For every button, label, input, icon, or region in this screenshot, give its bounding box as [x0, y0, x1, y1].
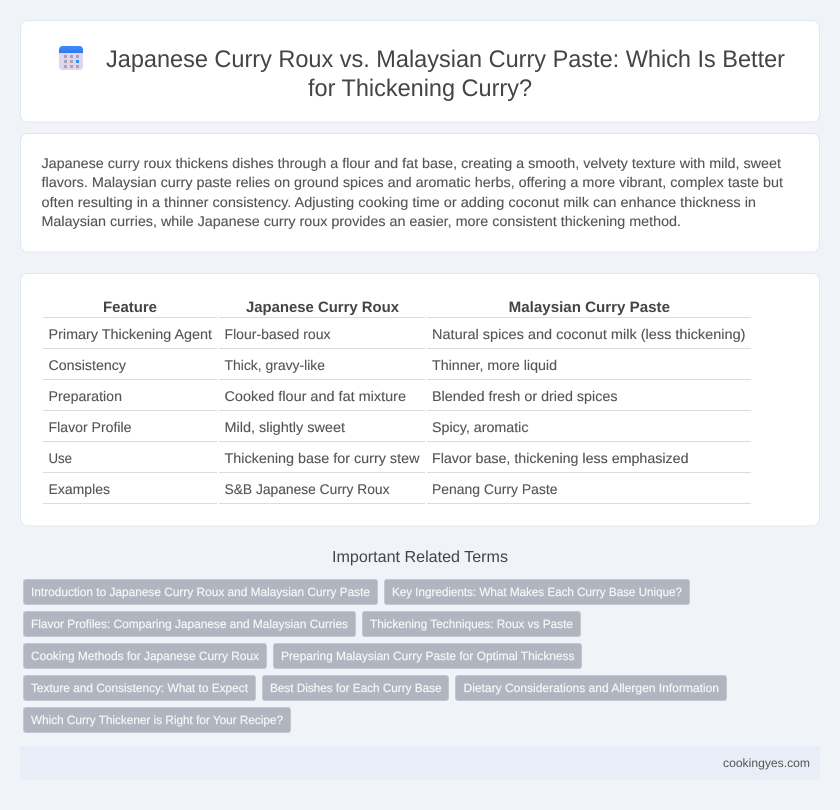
tag [24, 580, 378, 604]
row: flavor profile [48, 419, 528, 435]
row: primary thickening agent [48, 326, 746, 342]
footer: cookingyes.com [723, 756, 810, 770]
row: use: Thickening base for curry stew [224, 450, 420, 466]
summary text [42, 155, 783, 229]
row: flavor profile: Flavor Profile [48, 419, 132, 435]
tag [24, 708, 290, 732]
tag: Introduction to Japanese Curry Roux and Malaysian Curry Paste [31, 585, 370, 599]
row: use [48, 450, 688, 466]
panel: summary paragraph [20, 134, 820, 252]
summary text: flavors. Malaysian curry paste relies on ground spices and aromatic herbs, offering a more vibrant, complex taste but [42, 174, 783, 190]
tag [24, 612, 356, 636]
related term tags [24, 580, 726, 732]
tag [456, 676, 726, 700]
summary text: often resulting in a thinner consistency. Adjusting cooking time or adding coconut milk can enhance thickness in [42, 194, 756, 210]
tag [24, 676, 256, 700]
table header row [103, 299, 670, 316]
heading: important related terms: Important Related Terms [332, 549, 508, 566]
row: consistency [48, 357, 557, 373]
tag: Which Curry Thickener is Right for Your Recipe? [31, 713, 283, 727]
row: use: Flavor base, thickening less emphasized [432, 450, 688, 466]
tag: Flavor Profiles: Comparing Japanese and Malaysian Curries [31, 617, 348, 631]
row: preparation: Blended fresh or dried spices [432, 388, 618, 404]
row: primary thickening agent: Flour-based roux [224, 326, 330, 342]
summary text: Japanese curry roux thickens dishes through a flour and fat base, creating a smooth, velvety texture with mild, sweet [42, 155, 781, 171]
row: preparation: Preparation [48, 388, 122, 404]
table header row: Feature [103, 299, 157, 316]
tag [362, 612, 580, 636]
title: Japanese Curry Roux vs. Malaysian Curry Paste: Which Is Better [106, 46, 785, 73]
tag [384, 580, 690, 604]
tag: Best Dishes for Each Curry Base [270, 681, 442, 695]
row: examples [48, 481, 558, 497]
summary text: Malaysian curries, while Japanese curry roux provides an easier, more consistent thickening method. [42, 213, 681, 229]
tag [24, 644, 266, 668]
tag: Preparing Malaysian Curry Paste for Optimal Thickness [281, 649, 574, 663]
row: preparation [48, 388, 618, 404]
row: flavor profile: Spicy, aromatic [432, 419, 528, 435]
row: consistency: Thick, gravy-like [224, 357, 325, 373]
row: examples: Examples [48, 481, 110, 497]
tag [262, 676, 448, 700]
row: consistency: Thinner, more liquid [432, 357, 557, 373]
tag [274, 644, 582, 668]
row: consistency: Consistency [48, 357, 126, 373]
row: examples: Penang Curry Paste [432, 481, 558, 497]
row: primary thickening agent: Primary Thickening Agent [48, 326, 212, 342]
icon: calendar [59, 46, 83, 70]
row: flavor profile: Mild, slightly sweet [224, 419, 345, 435]
panel: header [20, 20, 820, 122]
row: use: Use [48, 450, 72, 466]
tag: Dietary Considerations and Allergen Information [464, 681, 719, 695]
title [106, 46, 785, 102]
panel: comparison table [20, 274, 820, 526]
title: for Thickening Curry? [308, 75, 532, 102]
row: examples: S&B Japanese Curry Roux [224, 481, 390, 497]
row: preparation: Cooked flour and fat mixture [224, 388, 406, 404]
footer [20, 746, 820, 780]
table header row: Japanese Curry Roux [246, 299, 400, 316]
tag: Texture and Consistency: What to Expect [31, 681, 249, 695]
tag: Key Ingredients: What Makes Each Curry Base Unique? [392, 585, 682, 599]
table header row: Malaysian Curry Paste [509, 299, 670, 316]
tag: Thickening Techniques: Roux vs Paste [370, 617, 573, 631]
tag: Cooking Methods for Japanese Curry Roux [31, 649, 259, 663]
row: primary thickening agent: Natural spices and coconut milk (less thickening) [432, 326, 746, 342]
